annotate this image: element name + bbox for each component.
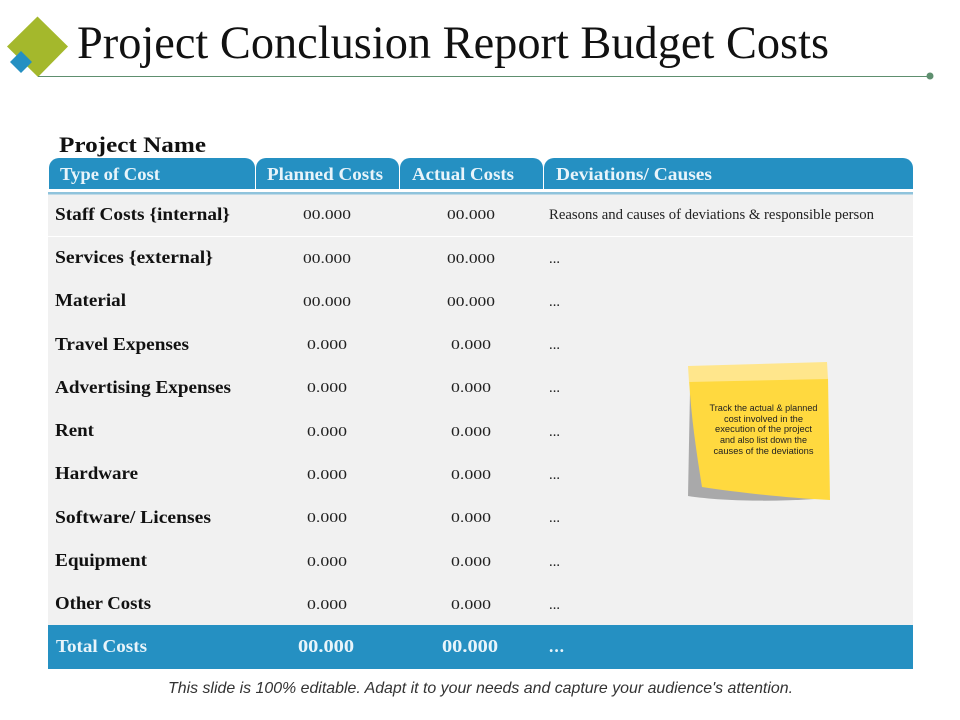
row: total costs <box>48 625 913 669</box>
row: travel expenses: 0.000 <box>307 338 347 353</box>
row: hardware: Hardware <box>55 463 138 483</box>
row: equipment <box>55 550 560 570</box>
header: deviations and causes: Deviations/ Causes <box>556 164 712 184</box>
row: advertising expenses: Advertising Expenses <box>55 377 231 397</box>
row: travel expenses <box>55 334 560 354</box>
header: type of cost <box>49 158 255 189</box>
row: staff costs: Reasons and causes of deviations & responsible person <box>549 207 875 223</box>
row: services: 00.000 <box>447 252 495 267</box>
header: actual costs: Actual Costs <box>412 164 514 184</box>
table <box>48 158 913 669</box>
row: other costs: 0.000 <box>451 598 491 613</box>
row: advertising expenses: ... <box>549 380 560 396</box>
row: total costs: ... <box>549 636 564 656</box>
row: services: 00.000 <box>303 252 351 267</box>
row: travel expenses: 0.000 <box>451 338 491 353</box>
row: total costs: 00.000 <box>442 636 498 656</box>
row: staff costs: Staff Costs {internal} <box>55 204 230 224</box>
header: type of cost: Type of Cost <box>60 164 160 184</box>
note text: causes of the deviations <box>714 446 814 456</box>
row: travel expenses: Travel Expenses <box>55 334 189 354</box>
row: staff costs: 00.000 <box>447 208 495 223</box>
row: hardware <box>55 463 560 483</box>
note text <box>710 403 818 456</box>
row: material: Material <box>55 290 126 310</box>
first row divider <box>48 236 913 237</box>
row: rent: 0.000 <box>307 425 347 440</box>
row: advertising expenses <box>55 377 560 397</box>
header underline <box>48 192 913 194</box>
row: staff costs: 00.000 <box>303 208 351 223</box>
header: actual costs <box>400 158 543 189</box>
note text: execution of the project <box>715 424 813 434</box>
row: advertising expenses: 0.000 <box>451 381 491 396</box>
row: material: 00.000 <box>303 295 351 310</box>
row: rent <box>55 420 560 440</box>
row: other costs: Other Costs <box>55 593 151 613</box>
row: equipment: 0.000 <box>307 555 347 570</box>
row: services: ... <box>549 251 560 267</box>
table body background <box>48 194 913 625</box>
note text: and also list down the <box>720 435 807 445</box>
row: travel expenses: ... <box>549 337 560 353</box>
row: material: 00.000 <box>447 295 495 310</box>
row: other costs <box>55 593 560 613</box>
row: hardware: 0.000 <box>451 468 491 483</box>
icon: header diamonds <box>7 16 68 77</box>
row: software and licenses: ... <box>549 510 560 526</box>
note text: Track the actual & planned <box>710 403 818 413</box>
header: planned costs: Planned Costs <box>267 164 383 184</box>
note body <box>689 378 830 500</box>
row: equipment: ... <box>549 554 560 570</box>
note shadow <box>688 390 815 501</box>
row: rent: ... <box>549 424 560 440</box>
header: planned costs <box>256 158 399 189</box>
row: total costs: Total Costs <box>56 636 147 656</box>
row: total costs: 00.000 <box>298 636 354 656</box>
title: Project Conclusion Report Budget Costs <box>77 17 829 69</box>
row: services: Services {external} <box>55 247 213 267</box>
row: hardware: ... <box>549 467 560 483</box>
row: advertising expenses: 0.000 <box>307 381 347 396</box>
row: equipment: Equipment <box>55 550 147 570</box>
row: software and licenses <box>55 507 560 527</box>
row: rent: Rent <box>55 420 94 440</box>
row: material: ... <box>549 294 560 310</box>
row: rent: 0.000 <box>451 425 491 440</box>
row: hardware: 0.000 <box>307 468 347 483</box>
row: other costs: ... <box>549 597 560 613</box>
project name heading: Project Name <box>59 132 206 157</box>
footer note: This slide is 100% editable. Adapt it to your needs and capture your audience's attention. <box>168 680 793 697</box>
row: other costs: 0.000 <box>307 598 347 613</box>
note tape band <box>688 362 828 382</box>
row: material <box>55 290 560 310</box>
row: staff costs <box>55 204 875 224</box>
title rule with end dot <box>38 72 934 80</box>
row: software and licenses: Software/ Licenses <box>55 507 211 527</box>
callout: sticky note <box>688 362 830 501</box>
row: software and licenses: 0.000 <box>307 511 347 526</box>
row: services <box>55 247 560 267</box>
note text: cost involved in the <box>724 414 803 424</box>
row: software and licenses: 0.000 <box>451 511 491 526</box>
row: equipment: 0.000 <box>451 555 491 570</box>
header: deviations and causes <box>544 158 913 189</box>
